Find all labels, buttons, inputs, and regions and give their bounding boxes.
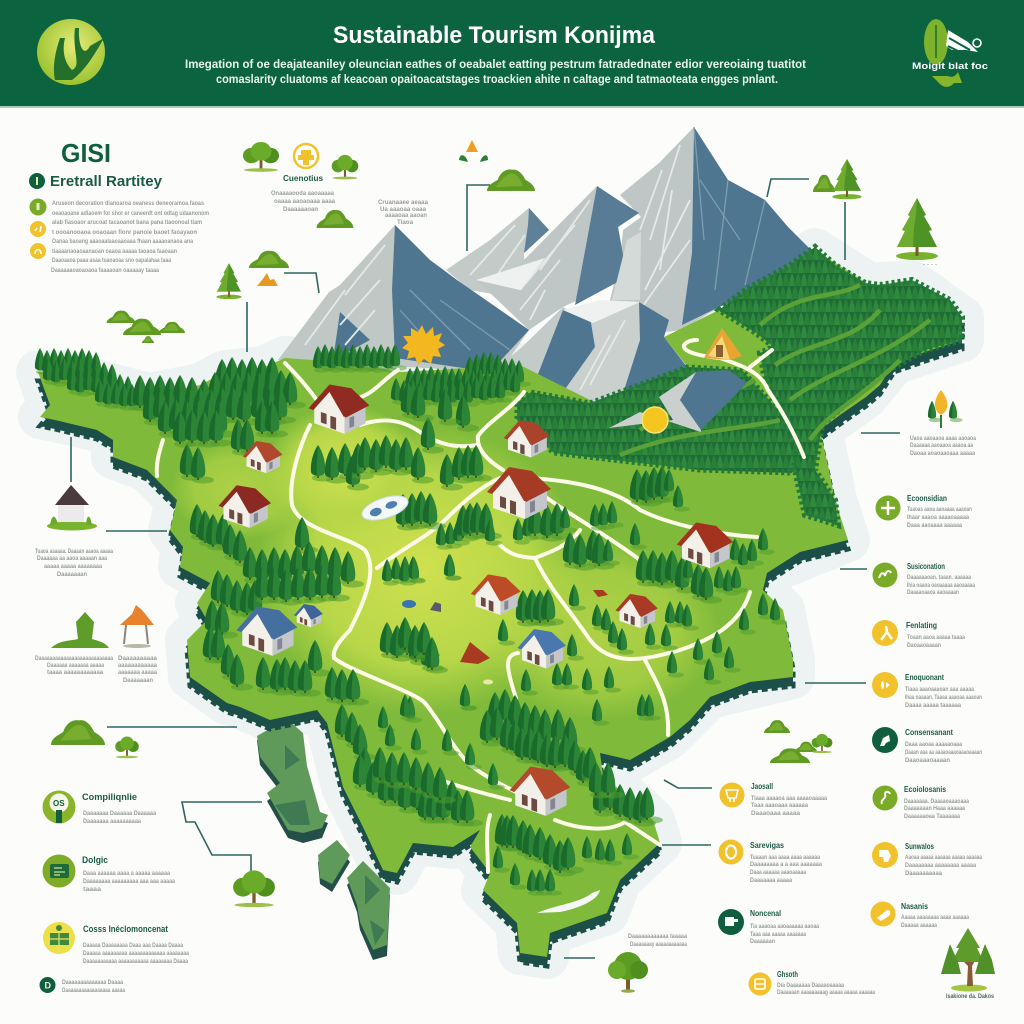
right list item: Consensanant: Daaa aaoaa aaaaaoaaa bbox=[905, 742, 963, 748]
left list item: D note: Daaaaaaaaaaaaaaaaa aaaaa bbox=[62, 988, 126, 994]
south note bbox=[564, 934, 688, 993]
lower list item: Sarevigas: Daaaaaaa aaaaa bbox=[750, 878, 793, 884]
right list item: Ecoonsidian: Tuaoas aaoa aaoaaaa aaaoan bbox=[907, 507, 972, 513]
east note bbox=[861, 390, 977, 457]
house: orange cottage bbox=[471, 574, 521, 615]
right list item: Ecoonsidian: Daaa aaoaaaa aaaaaa bbox=[907, 523, 963, 529]
map halo bbox=[38, 250, 962, 957]
info block: overall bbox=[29, 138, 209, 274]
right list item: Ecoonsidian: Ecoonsidian bbox=[907, 493, 947, 503]
south forests bbox=[335, 684, 663, 896]
right list item: Nasanis: Nasanis bbox=[901, 901, 928, 911]
small peak in forest bbox=[609, 370, 747, 432]
text lines: Cruanaaee aeaaa bbox=[378, 200, 429, 206]
golden orb bbox=[642, 407, 668, 433]
right list item: Enoquonant: Daaaa aaaaa taaaaaa bbox=[905, 703, 962, 709]
text lines: aaaaoaa aaoan bbox=[385, 213, 427, 219]
mountain foot forests bbox=[35, 344, 531, 411]
left list item: Dolgic: Daaa aaaaaa aaaa a aaaaa aaaaaa bbox=[83, 871, 171, 877]
lower list item: Noncenal: Noncenal bbox=[750, 908, 781, 918]
west callout: cottage: Daaaaaaan bbox=[57, 572, 87, 578]
right list item: Sunwalos: Aaoaa aaaaa aaaaaa aaaaa aaaaaa bbox=[905, 855, 983, 861]
right list item: Enoquonant bbox=[805, 672, 982, 709]
pond bbox=[359, 491, 411, 525]
label: Cuenotius bbox=[283, 173, 323, 183]
west callout: trail sign bbox=[35, 605, 158, 684]
west callout: cottage bbox=[35, 437, 167, 578]
east note: Daoaa aoaoaaoaaa aaaaa bbox=[910, 451, 976, 457]
text lines bbox=[378, 200, 429, 226]
west callout: cottage: Daaaaaa aa aaoa aaaaan aaa bbox=[37, 556, 108, 562]
east note: Uaoa aaoaaoa aaaa aaoaoa bbox=[910, 436, 977, 442]
left list item: Compiliqnlie: Daaaaaaa Daaaaaa Daaaaaa bbox=[83, 811, 157, 817]
right list item: Fenlating bbox=[872, 620, 966, 649]
right list item: Nasanis: Aaaaa aaaaaaaa aaaa aaaaaa bbox=[901, 915, 970, 921]
list text: oeaoaoane adlaoem for shor er caneerdt ont odtag udaanonom bbox=[52, 211, 209, 217]
left list item: Cosss: Daaaaa aaaaaaaaa aaaaaaaaaaaaa aaaaaaaa bbox=[83, 951, 190, 957]
lower list item: Noncenal: Daaaaaan bbox=[750, 939, 775, 945]
list text: Aruseon decoration dianoaroa oeaness deneoramoa faoas bbox=[52, 201, 205, 207]
left list item: Cosss: Daaaaaaaaaaa aaaaaaaaaaa aaaaaaaa Daaaa bbox=[83, 959, 189, 965]
left list item: D note: D bbox=[44, 980, 52, 990]
right list item: Susiconation: Susiconation bbox=[907, 561, 945, 571]
list text: Oanaa baoang aaaoaalaaoaaoaaa fhaan aaaaoanaoa ana bbox=[52, 239, 194, 245]
left list item: Dolgic: Dolgic bbox=[82, 855, 108, 866]
west callout: trail sign: Daaaaaaan bbox=[123, 678, 153, 684]
central meadow trees bbox=[380, 466, 787, 726]
block subtitle: Eretrall Rartitey bbox=[50, 173, 163, 190]
north east trees: . . . . bbox=[923, 261, 937, 267]
caption: Isakione da. Dakos bbox=[946, 994, 995, 1000]
header emblem bbox=[912, 19, 988, 87]
west callout: trail sign: taaaa aaaaaaaaaaaa bbox=[47, 670, 104, 676]
left list item: D note: Daaaaaaaaaaaaaa Daaaa bbox=[62, 980, 124, 986]
house: east lodge bbox=[677, 522, 733, 568]
top left trees bbox=[107, 251, 319, 352]
right list item: Susiconation bbox=[840, 561, 976, 596]
meadow props bbox=[402, 590, 608, 684]
header logo bbox=[37, 19, 105, 85]
left list item: D note bbox=[40, 977, 126, 994]
east note: Daaaaaa aaoaaoa aaaoa aa bbox=[910, 443, 974, 449]
left list item: Cosss: Cosss Inéclomoncenat bbox=[83, 924, 169, 935]
right list item: Consensanant: Daaan aaa aa aaaaoaaaoaaaoaaaan bbox=[905, 750, 982, 756]
text lines: Onaaaaooda aaoaaaaa bbox=[271, 191, 335, 197]
south lake gap bbox=[537, 890, 600, 913]
sunny meadows bbox=[170, 405, 720, 720]
house: main red lodge bbox=[309, 384, 369, 434]
list text: tiaaaanaoaoaanaoan oaaoa aaaaa taoaoa faaoaan bbox=[52, 249, 177, 255]
back peak bbox=[446, 208, 549, 300]
orange hut bbox=[257, 273, 278, 286]
right list item: Ecoiolosanis: Ecoiolosanis bbox=[904, 784, 946, 794]
list icons bbox=[30, 198, 46, 259]
islands bbox=[257, 719, 390, 960]
icon: cottage bbox=[47, 485, 97, 530]
sun emblem bbox=[402, 325, 445, 365]
west bush and tree bbox=[51, 720, 237, 758]
lower list item: Sarevigas bbox=[662, 840, 823, 884]
right list item: Enoquonant: Ihaa oaaaan. Taaaa aaaoaa aaaoan bbox=[905, 695, 982, 701]
left list item: Compiliqnlie: OS bbox=[53, 799, 65, 808]
list text: Daaaaaaoaoaoaoa faaaaoan oaaaaay taaaa bbox=[51, 268, 160, 274]
right list item: Consensanant: Consensanant bbox=[905, 727, 953, 737]
lower list item: Sarevigas: Daaaaaaaa a a aaa aaaaaaa bbox=[750, 862, 823, 868]
lower peak west bbox=[503, 307, 595, 392]
icon: yellow badge bbox=[294, 144, 318, 168]
left peak bbox=[278, 225, 529, 372]
list text bbox=[51, 201, 209, 274]
left list item: Dolgic: taaaa bbox=[83, 887, 102, 893]
lower list item: Noncenal: Tia aaaoaa aaoaaaaaa aaoaa bbox=[750, 924, 820, 930]
right list item: Ecoiolosanis: Daaaaaaan Haaa aaaaaa bbox=[904, 806, 966, 812]
west callout: cottage: Tuaoa aaaaaa. Daaaan aaaoa aaaaa bbox=[35, 549, 114, 555]
lower list item: Jaosall bbox=[664, 780, 828, 817]
right list item: Ecoonsidian: Ihaar aaaoa aaaaoaaaaa bbox=[907, 515, 970, 521]
right list item: Susiconation: Ihia oaaoa oaoaaaaa aaoaaaaa bbox=[907, 583, 976, 589]
header emblem: Moigit blat foc bbox=[912, 61, 988, 72]
south west forest bbox=[190, 504, 369, 706]
bush bbox=[487, 170, 535, 191]
right list item: Susiconation: Daaaaaaoan. taaan. aaaaaa bbox=[907, 575, 972, 581]
south note: Daaaaaaaaaaaa taaaaa bbox=[628, 934, 688, 940]
right list item: Fenlating: Daoaaoaaaan bbox=[907, 643, 941, 649]
right list item: Enoquonant: Tiaaa aaaoaaaoan aaa aaaaa bbox=[905, 687, 975, 693]
text lines: Tiaoa bbox=[397, 220, 414, 226]
lower list item: Ghsoth: Dia Daaaaaaa Daaaaoaaaaa bbox=[777, 983, 845, 989]
title: Sustainable Tourism Konijma bbox=[333, 22, 656, 49]
north east trees bbox=[767, 159, 938, 267]
south west connector and tree bbox=[182, 802, 275, 907]
right list item: Susiconation: Daaaaoaaoa aaoaaaan bbox=[907, 590, 959, 596]
lower list item: Jaosall: Jaosall bbox=[751, 781, 773, 791]
mountains bbox=[278, 127, 811, 407]
house: blue villa bbox=[237, 606, 297, 656]
house: central lodge bbox=[487, 467, 551, 519]
left list item: Compiliqnlie: Daaaaaaa aaaaaaaaaa bbox=[83, 819, 142, 825]
west callout: trail sign: aaaaaaaaaaaa bbox=[118, 663, 158, 669]
front peak bbox=[563, 300, 687, 407]
lower list item: Sarevigas: Tuaaan aaa aaaa aaaa aaaaaa bbox=[750, 855, 821, 861]
left list item: Cosss: Daaaaa Daaaaaaaa Daaa aaa Daaaa Daaaa bbox=[83, 943, 184, 949]
right list item: Ecoiolosanis: Daaaaaaa. Daaaaoaaaoaaa bbox=[904, 799, 970, 805]
lower list item: Ghsoth: Ghsoth bbox=[777, 969, 798, 979]
right list item: Fenlating: Fenlating bbox=[906, 620, 937, 630]
east small bushes bbox=[764, 720, 832, 763]
high peak bbox=[600, 127, 811, 340]
central north forest bbox=[311, 382, 492, 531]
west callout: trail sign: Daaaaaaaaaaaaaaaaaaaaaaaaaaa bbox=[35, 656, 114, 662]
block title: GISI bbox=[61, 138, 111, 168]
list text: t oooanooaoa ooaoaan fionr panoie baoet faoayaon bbox=[52, 230, 197, 236]
west callout: trail sign: Daaaaaa aaaaaaa aaaaa bbox=[47, 663, 105, 669]
text lines: Ua aaaoaa oaaa bbox=[380, 207, 427, 213]
west callout: trail sign: aaaaaaa aaaaa bbox=[118, 670, 158, 676]
text lines bbox=[271, 191, 336, 213]
house: west cottage bbox=[243, 441, 282, 473]
house: south-east cottage bbox=[616, 594, 658, 628]
right list item: Sunwalos: Sunwalos bbox=[905, 841, 934, 851]
lower list item: Ghsoth bbox=[748, 969, 876, 996]
right list item: Sunwalos: Daaaaaaaa aaaaaaaa aaaaa bbox=[905, 863, 977, 869]
top panel: Cuenotius bbox=[243, 142, 358, 228]
right list item: Ecoiolosanis bbox=[872, 784, 970, 820]
snow band bbox=[476, 258, 545, 290]
subtitle: Imegation of oe deajateaniley oleuncian eathes of oeabalet eatting pestrum fatradednater edior vereoiaing tuatitot bbox=[185, 59, 806, 71]
map land bbox=[38, 250, 962, 957]
right list item: Ecoonsidian bbox=[876, 493, 972, 529]
lower list item: Ghsoth: Daaaaaan aaaaaaaaag aaaaa aaaaa aaaaaa bbox=[777, 990, 876, 996]
big tree group bbox=[941, 928, 995, 1000]
west callout: cottage: aaaaa aaaaa aaaaaaaa bbox=[44, 564, 103, 570]
house: small blue hut bbox=[294, 604, 323, 627]
list text: Daaoaaoa paaa asaa tuaoaoaa sno oapaiahaa taaa bbox=[52, 258, 172, 264]
right list item: Sunwalos: Daaaaaaaaaa bbox=[905, 871, 943, 877]
left list item: Dolgic bbox=[42, 854, 176, 893]
right list item: Nasanis bbox=[870, 901, 970, 929]
connector bbox=[467, 185, 490, 251]
right list item: Ecoiolosanis: Daaaaaaoaa Taaaaaaa bbox=[904, 814, 961, 820]
house: north cottage bbox=[504, 420, 550, 458]
bush conifer bbox=[51, 612, 109, 648]
lower list item: Noncenal: Taaa aaa aaaaa aaaaaaa bbox=[750, 932, 807, 938]
round tree bbox=[608, 952, 648, 993]
right list item: Consensanant bbox=[872, 727, 982, 764]
lower list item: Sarevigas: Sarevigas bbox=[750, 840, 784, 850]
house: blue cottage bbox=[517, 629, 566, 668]
text lines: Daaaaaaoan bbox=[283, 207, 318, 213]
left list item: Cosss bbox=[43, 922, 190, 965]
right list item: Nasanis: Daaaaa aaaaaa bbox=[901, 923, 938, 929]
road network bbox=[157, 340, 804, 872]
block badge bbox=[29, 173, 45, 189]
right list item: Fenlating: Toaan aaoa aaaaa taaaa bbox=[907, 635, 966, 641]
orange sign bbox=[120, 605, 154, 648]
centre peak bbox=[476, 186, 641, 330]
header banner bbox=[0, 0, 1024, 108]
right list item: Enoquonant: Enoquonant bbox=[905, 672, 944, 682]
house: southern lodge bbox=[510, 766, 570, 816]
tent bbox=[460, 642, 490, 664]
text lines: oaaaa aaoaoaaa aaaa bbox=[274, 199, 336, 205]
south note: Daaaaaaay aaaaaaaaaaaa bbox=[630, 942, 688, 948]
lower list item: Sarevigas: Daaa aaaaaa aaaoaaaaa bbox=[750, 870, 807, 876]
house: red cottage bbox=[219, 485, 271, 528]
left list item: Dolgic: Daaaaaaaa aaaaaaaaa aaa aaa aaaaa bbox=[83, 879, 176, 885]
lower list item: Noncenal bbox=[718, 908, 820, 945]
right list item: Sunwalos bbox=[872, 841, 983, 877]
west callout: trail sign: Daaaaaaaaaa bbox=[118, 656, 158, 662]
list text: alab fiasoaor arucoat tacaoanot bana pana tiaoonoal tiam bbox=[52, 220, 202, 226]
subtitle bbox=[185, 59, 806, 86]
top panel: village note bbox=[378, 140, 535, 251]
icon: golden tree bbox=[928, 390, 963, 428]
lower list item: Jaosall: Tiaaa aaaaoa aaa aaaaoaaaaa bbox=[751, 796, 828, 802]
right list item: Consensanant: Daaoaaaoaaaan bbox=[905, 758, 950, 764]
left list item: Compiliqnlie: Compiliqnlie bbox=[82, 792, 137, 803]
left list item: Compiliqnlie bbox=[42, 790, 157, 825]
forest east slopes bbox=[517, 247, 962, 525]
icon: top chalet bbox=[459, 140, 488, 162]
west forest bbox=[133, 357, 306, 484]
lower list item: Jaosall: Daaaoaaa aaaaa bbox=[751, 811, 801, 817]
map cliff base bbox=[38, 259, 962, 966]
subtitle: comaslarity cluatoms af keacoan opaitoacatstages troackien ahite n caltage and tatmaoteata engges pnlant. bbox=[216, 74, 778, 86]
lower list item: Jaosall: Taaa aaaoaaa aaaaaa bbox=[751, 803, 809, 809]
mountain cabin bbox=[704, 328, 742, 360]
